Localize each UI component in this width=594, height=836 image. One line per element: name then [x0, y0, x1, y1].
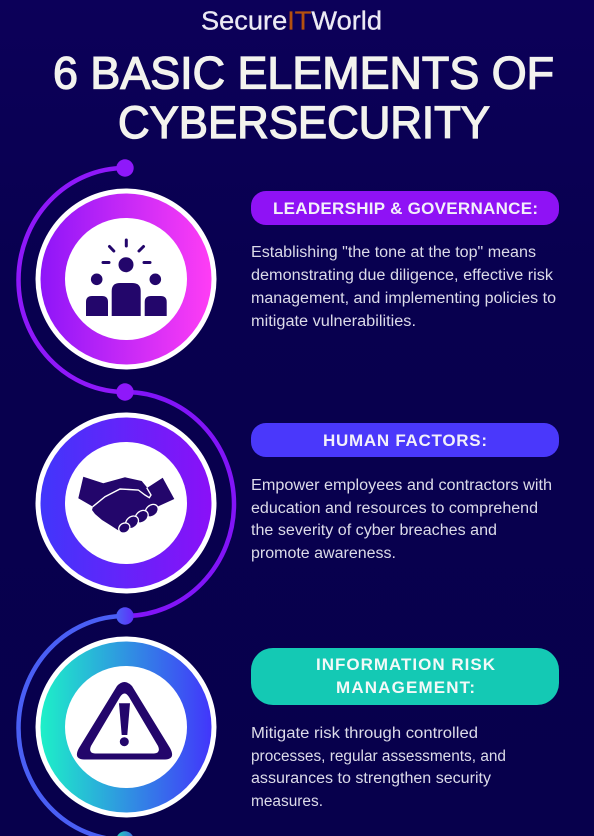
text block: human factors	[251, 477, 552, 562]
text block: information risk management: Mitigate risk through controlled	[251, 725, 478, 742]
title: CYBERSECURITY	[118, 97, 490, 148]
text block: human factors: the severity of cyber breaches and	[251, 522, 497, 539]
icon: team with leader	[86, 240, 167, 316]
text block: leadership and governance: demonstrating due diligence, effective risk	[251, 267, 553, 284]
text block: leadership and governance: management, and implementing policies to	[251, 290, 556, 307]
text block: human factors: education and resources to comprehend	[251, 500, 538, 517]
heading: information risk management: INFORMATION RISK	[316, 655, 496, 674]
heading: leadership and governance	[251, 191, 559, 225]
text block: information risk management: measures.	[251, 793, 323, 810]
heading: human factors	[251, 423, 559, 457]
text block: leadership and governance	[251, 244, 556, 330]
title	[53, 48, 554, 148]
heading: information risk management: MANAGEMENT:	[336, 678, 475, 697]
panel: leadership icon disc	[36, 188, 216, 370]
text block: leadership and governance: Establishing "the tone at the top" means	[251, 244, 536, 261]
connector arcs and nodes	[18, 159, 234, 836]
panel: human factors icon disc	[36, 412, 216, 594]
text block: information risk management: processes, regular assessments, and	[251, 748, 506, 765]
icon: warning triangle	[77, 682, 172, 760]
heading: human factors: HUMAN FACTORS:	[323, 431, 487, 450]
heading: leadership and governance: LEADERSHIP & GOVERNANCE:	[273, 199, 538, 218]
logo: SecureITWorld: SecureITWorld	[201, 8, 382, 36]
icon: handshake	[78, 477, 174, 535]
text block: leadership and governance: mitigate vulnerabilities.	[251, 313, 416, 330]
text block: information risk management: assurances to strengthen security	[251, 770, 491, 787]
panel: information risk icon disc	[36, 636, 216, 818]
text block: human factors: promote awareness.	[251, 545, 396, 562]
title: 6 BASIC ELEMENTS OF	[53, 48, 554, 98]
text block: human factors: Empower employees and contractors with	[251, 477, 552, 494]
text block: information risk management	[251, 725, 506, 810]
heading: information risk management	[251, 648, 559, 705]
